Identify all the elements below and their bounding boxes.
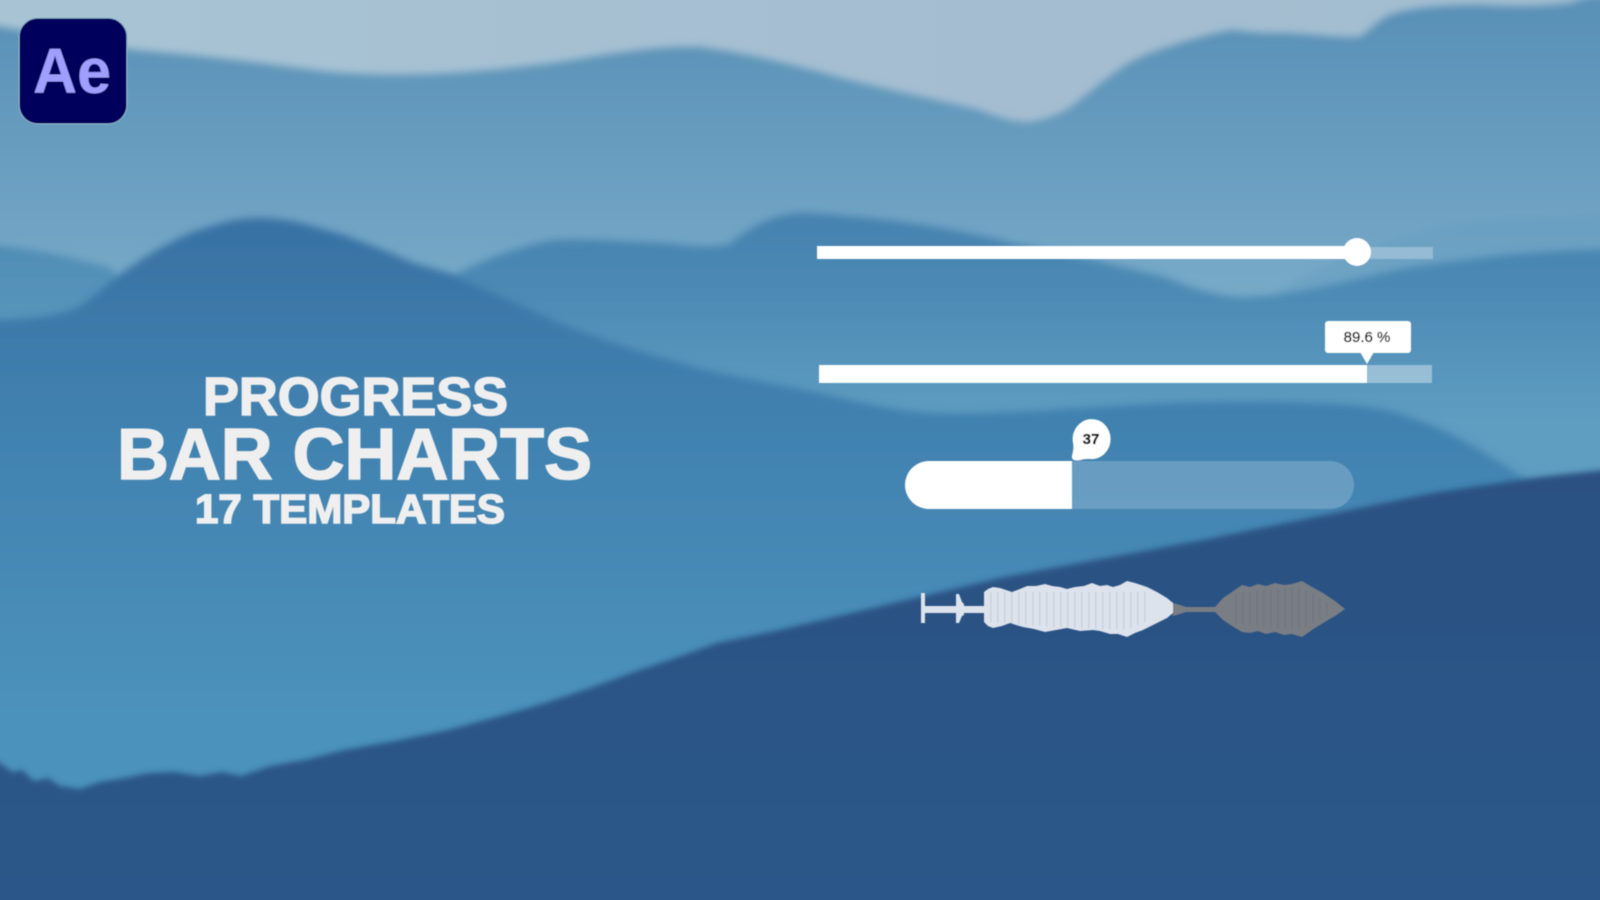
progress bar: rounded with bubble 37: 37 [1083, 431, 1099, 448]
progress bar: tooltip 89.6 %: 89.6 % [1344, 329, 1390, 346]
progress bar: rounded with bubble 37 [905, 419, 1354, 509]
title [117, 367, 592, 532]
waveform played part [921, 581, 1173, 637]
progress bar: tooltip 89.6 % [819, 321, 1432, 383]
title line: progress: PROGRESS [203, 367, 508, 427]
title line: template count: 17 TEMPLATES [195, 486, 505, 532]
title line: bar charts: BAR CHARTS [117, 415, 592, 495]
progress bar: audio waveform [921, 581, 1345, 637]
Ae logo icon [19, 18, 127, 124]
Ae logo icon: Ae [33, 35, 111, 107]
progress bar: slider with knob [817, 238, 1433, 266]
waveform remaining part [1173, 581, 1345, 637]
